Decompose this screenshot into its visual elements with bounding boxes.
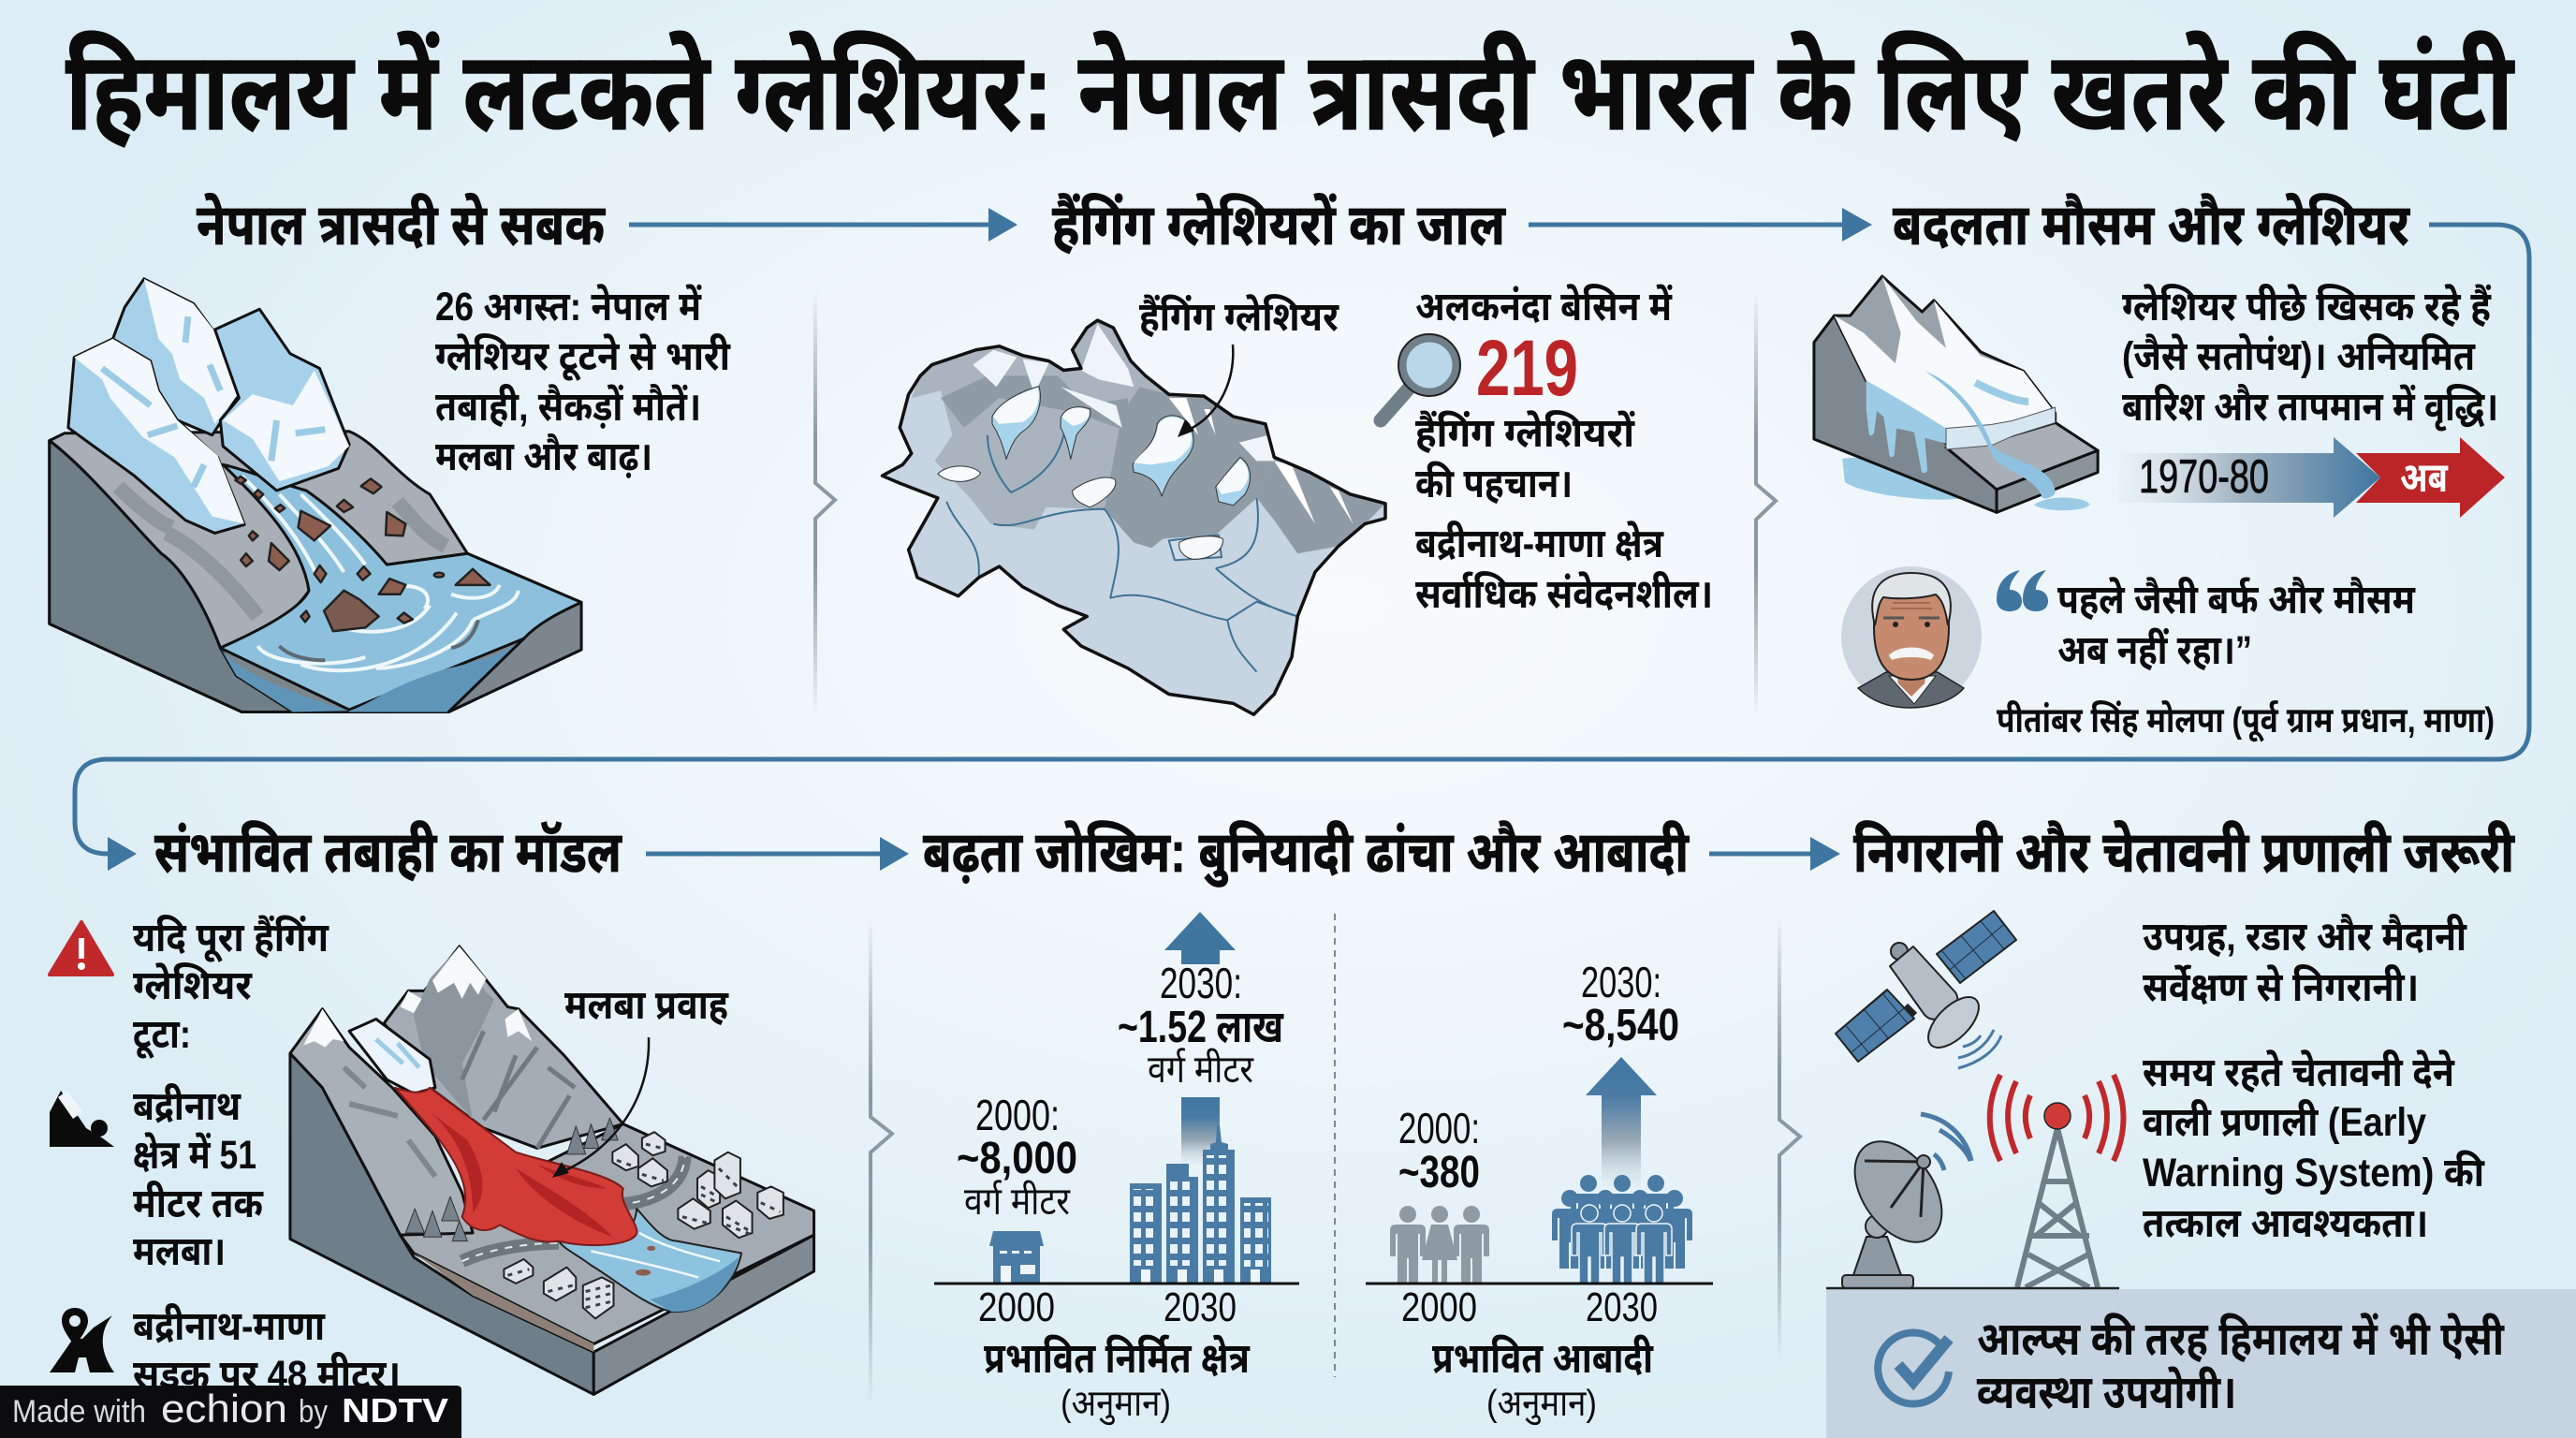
- panel: Nepal tragedy: [50, 193, 731, 712]
- text: if glacier breaks: टूटा:: [133, 1012, 191, 1059]
- value 2000: ~8,000: [957, 1134, 1077, 1183]
- divider 1: [815, 290, 835, 716]
- axis labels: 2030: [1586, 1284, 1658, 1330]
- value 2030: ~8,540: [1562, 1001, 1679, 1050]
- arrow up: [1164, 912, 1236, 964]
- text: Badrinath debris: बद्रीनाथ: [133, 1083, 242, 1129]
- body text: Warning System) की: [2143, 1150, 2485, 1196]
- watermark badge: by: [299, 1394, 328, 1430]
- value 2000: 2000:: [1398, 1104, 1480, 1152]
- value 2000: वर्ग मीटर: [964, 1180, 1071, 1223]
- divider 4: [1779, 914, 1800, 1362]
- chart caption: (अनुमान): [1486, 1384, 1597, 1425]
- chart caption: [1432, 1334, 1654, 1425]
- panel: monitoring and warning: [1826, 820, 2576, 1438]
- chart caption: [984, 1334, 1251, 1425]
- text: road debris: [133, 1303, 401, 1398]
- body text: [2143, 914, 2485, 1246]
- footer callout: [1826, 1288, 2576, 1438]
- value 2030: 2030:: [1581, 958, 1661, 1006]
- value 2030: [1118, 959, 1284, 1091]
- body text: समय रहते चेतावनी देने: [2143, 1049, 2455, 1095]
- timeline arrow: 1970-80: [2139, 450, 2269, 503]
- stat text: हैंगिंग ग्लेशियरों: [1415, 410, 1635, 456]
- text: Badrinath debris: क्षेत्र में 51: [133, 1132, 256, 1178]
- axis labels: [1401, 1284, 1658, 1330]
- watermark badge: NDTV: [342, 1391, 448, 1430]
- callout text: [1976, 1313, 2505, 1418]
- quote text: [1997, 577, 2495, 742]
- icon: magnifier: [1381, 334, 1460, 420]
- quote text: अब नहीं रहा।”: [2057, 627, 2252, 673]
- heading: संभावित तबाही का मॉडल: [154, 820, 622, 884]
- arrow: lesson to network: [629, 208, 1017, 242]
- value 2000: [957, 1091, 1077, 1223]
- dashed separator: [1334, 914, 1336, 1377]
- chart caption: (अनुमान): [1061, 1384, 1171, 1425]
- stat text: सर्वाधिक संवेदनशील।: [1415, 571, 1713, 617]
- axis: [934, 1283, 1299, 1284]
- text: Badrinath debris: [133, 1083, 264, 1274]
- icon: small group: [1390, 1206, 1489, 1284]
- label: debris flow: मलबा प्रवाह: [564, 983, 729, 1028]
- illustration: debris flow model: [290, 946, 814, 1394]
- panel: changing climate: [1814, 193, 2505, 742]
- map: Uttarakhand: [882, 320, 1385, 714]
- value 2030: वर्ग मीटर: [1148, 1048, 1254, 1091]
- axis labels: 2030: [1164, 1284, 1237, 1330]
- chart: population: [1366, 958, 1713, 1425]
- text: if glacier breaks: ग्लेशियर: [133, 962, 253, 1008]
- text: Badrinath debris: मलबा।: [133, 1229, 226, 1274]
- icon: road with pin: [50, 1308, 114, 1372]
- divider 3: [871, 917, 892, 1404]
- map label with arrow: [1139, 294, 1339, 437]
- heading: नेपाल त्रासदी से सबक: [197, 193, 606, 257]
- body text: सर्वेक्षण से निगरानी।: [2143, 964, 2419, 1010]
- quote text: पीतांबर सिंह मोलपा (पूर्व ग्राम प्रधान, माणा): [1997, 699, 2495, 742]
- body text: तबाही, सैकड़ों मौतें।: [435, 384, 701, 430]
- value 2030: ~1.52 लाख: [1118, 1003, 1284, 1052]
- value 2030: 2030:: [1160, 959, 1242, 1007]
- body text: (जैसे सतोपंथ)। अनियमित: [2122, 333, 2476, 379]
- body text: ग्लेशियर टूटने से भारी: [435, 333, 731, 381]
- watermark badge: [0, 1386, 461, 1438]
- heading: बढ़ता जोखिम: बुनियादी ढांचा और आबादी: [923, 820, 1690, 888]
- watermark badge: echion: [161, 1387, 287, 1431]
- axis labels: [978, 1284, 1237, 1330]
- heading: बदलता मौसम और ग्लेशियर: [1893, 193, 2410, 257]
- value 2000: 2000:: [975, 1091, 1060, 1139]
- body text: 26 अगस्त: नेपाल में: [435, 284, 702, 330]
- arrow: network to climate: [1529, 208, 1872, 242]
- body text: वाली प्रणाली (Early: [2143, 1099, 2426, 1145]
- portrait: [1841, 566, 1982, 708]
- text: Badrinath debris: मीटर तक: [133, 1181, 264, 1226]
- chart: built-up area: [934, 912, 1299, 1425]
- text: if glacier breaks: [133, 915, 329, 1059]
- divider 2: [1756, 290, 1776, 716]
- value 2000: ~380: [1398, 1148, 1480, 1197]
- quote text: पहले जैसी बर्फ और मौसम: [2057, 577, 2416, 623]
- stat text: [1415, 284, 1713, 617]
- icon: tall buildings: [1130, 1125, 1271, 1284]
- body text: बारिश और तापमान में वृद्धि।: [2122, 384, 2498, 432]
- arrow: into model panel: [108, 837, 137, 871]
- timeline arrow: अब: [2400, 455, 2449, 501]
- arrow: model to risk: [646, 837, 909, 871]
- timeline arrow: [2119, 437, 2505, 518]
- chart caption: प्रभावित निर्मित क्षेत्र: [984, 1334, 1251, 1382]
- icon: quote mark: [1997, 570, 2048, 611]
- map label with arrow: हैंगिंग ग्लेशियर: [1139, 294, 1339, 340]
- value 2000: [1398, 1104, 1480, 1197]
- panel: possible disaster model: [50, 820, 814, 1398]
- stat text: की पहचान।: [1415, 461, 1573, 506]
- icon: landslide: [50, 1091, 114, 1147]
- body text: [435, 284, 731, 479]
- label: debris flow: [552, 983, 729, 1178]
- panel: rising risk: [0, 820, 2576, 1438]
- body text: तत्काल आवश्यकता।: [2143, 1201, 2428, 1246]
- icon: check: [1878, 1333, 1949, 1404]
- axis labels: 2000: [978, 1284, 1055, 1330]
- stat: 219: 219: [1476, 324, 1578, 412]
- flow connector line around top row: [75, 225, 2529, 854]
- icon: crowd: [1552, 1175, 1692, 1284]
- axis labels: 2000: [1401, 1284, 1477, 1330]
- icon: warning tower: [1990, 1075, 2123, 1287]
- stat text: बद्रीनाथ-माणा क्षेत्र: [1415, 521, 1664, 566]
- body text: उपग्रह, रडार और मैदानी: [2143, 914, 2467, 960]
- arrow: risk to monitoring: [1709, 837, 1840, 871]
- illustration: glacier collapse block: [50, 279, 581, 712]
- value 2030: [1562, 958, 1679, 1050]
- heading: हैंगिंग ग्लेशियरों का जाल: [1052, 193, 1506, 257]
- illustration: retreating glacier: [1814, 276, 2098, 512]
- stat text: अलकनंदा बेसिन में: [1415, 284, 1673, 330]
- icon: warning: [50, 922, 112, 975]
- body text: मलबा और बाढ़।: [435, 433, 652, 479]
- body text: ग्लेशियर पीछे खिसक रहे हैं: [2122, 284, 2492, 330]
- chart caption: प्रभावित आबादी: [1432, 1334, 1654, 1382]
- text: road debris: बद्रीनाथ-माणा: [133, 1303, 326, 1349]
- body text: [2122, 284, 2498, 432]
- icon: dish antenna: [1837, 1114, 1971, 1288]
- callout text: व्यवस्था उपयोगी।: [1976, 1366, 2236, 1418]
- panel: hanging glacier network: [882, 193, 1713, 714]
- icon: small building: [989, 1231, 1044, 1284]
- watermark badge: Made with: [12, 1394, 146, 1430]
- arrow up: [1586, 1057, 1657, 1187]
- icon: satellite: [1836, 911, 2016, 1068]
- text: road debris: सड़क पर 48 मीटर।: [133, 1352, 401, 1398]
- text: if glacier breaks: यदि पूरा हैंगिंग: [133, 915, 329, 962]
- axis: [1366, 1283, 1713, 1284]
